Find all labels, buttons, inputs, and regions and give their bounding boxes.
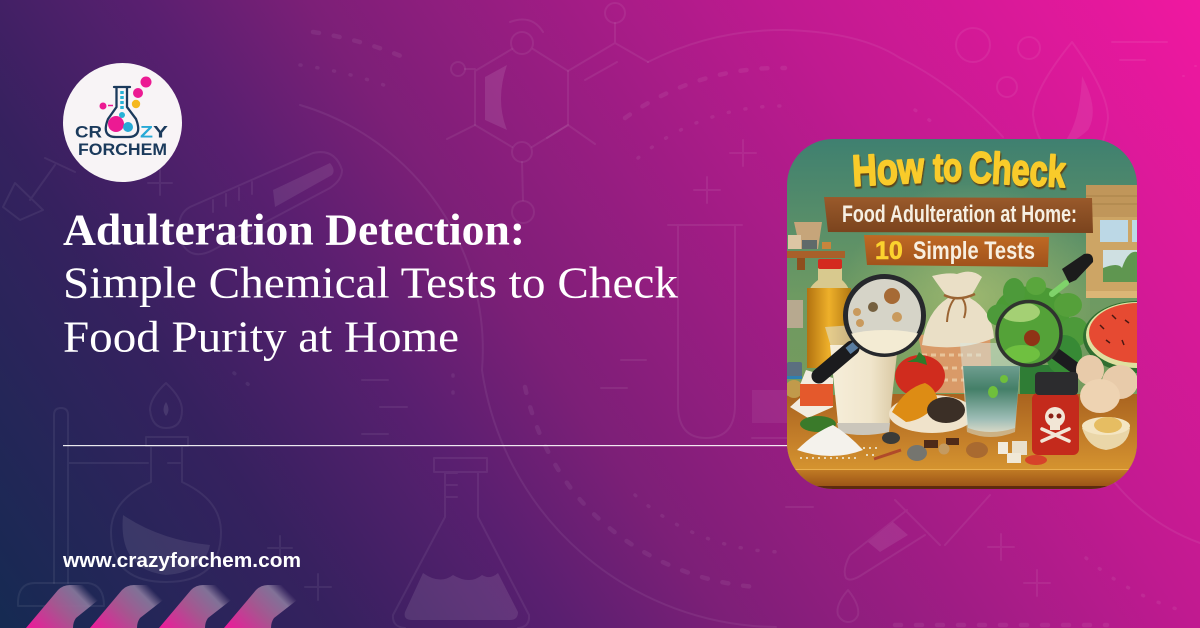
eggs — [1076, 355, 1138, 413]
plank: 10 simple tests — [864, 235, 1049, 267]
heading: how to check: How — [851, 143, 926, 196]
table — [787, 394, 1137, 489]
poison jar — [1032, 372, 1079, 455]
logo — [63, 63, 182, 182]
burner flame and round flask — [111, 383, 221, 582]
table scatter — [874, 432, 1047, 465]
heading: how to check: to — [933, 146, 962, 190]
erlenmeyer flask — [393, 458, 529, 628]
logo wordmark: FORCHEM — [78, 140, 167, 159]
sack and rice — [918, 272, 994, 393]
icon: flask — [100, 76, 152, 137]
magnifier 1 — [819, 276, 925, 376]
small bowl — [1082, 417, 1130, 450]
illustration: food adulteration card — [787, 139, 1137, 489]
plank: 10 simple tests: Simple Tests — [913, 237, 1035, 265]
shelf with jars — [787, 222, 845, 328]
website url: www.crazyforchem.com — [62, 550, 301, 572]
heading: how to check: Check — [967, 143, 1067, 197]
title: Food Purity at Home — [63, 312, 459, 362]
chevrons — [26, 585, 301, 628]
dashed arcs — [313, 32, 1107, 625]
watermelon — [1083, 301, 1137, 373]
heading: how to check — [853, 150, 1068, 190]
magnifier 2 — [997, 302, 1090, 379]
plus and minus marks — [268, 140, 1050, 600]
dropper bottom right — [837, 495, 990, 622]
water drop and circles — [956, 28, 1196, 150]
test tube — [668, 225, 742, 438]
greens — [987, 277, 1089, 403]
plank: 10 simple tests: 10 — [875, 237, 903, 265]
window — [1086, 185, 1141, 298]
large arcs — [300, 105, 776, 627]
thermometer and syringe — [3, 152, 342, 254]
title: Simple Chemical Tests to Check — [63, 258, 678, 308]
small spice jar and block — [785, 362, 833, 418]
burette stand — [18, 408, 148, 606]
plank: food adulteration: Food Adulteration at Home: — [842, 201, 1077, 228]
salt pile and leaf — [797, 416, 880, 458]
logo wordmark: CR — [75, 122, 102, 142]
logo wordmark: Y — [153, 122, 169, 142]
oil bottle — [807, 259, 851, 368]
logo wordmark: Z — [140, 122, 153, 142]
divider — [63, 445, 788, 446]
plank: food adulteration — [824, 197, 1093, 233]
logo wordmark — [75, 122, 169, 159]
milk glass — [825, 322, 898, 435]
dropper — [1052, 254, 1093, 294]
title: Adulteration Detection: — [63, 206, 525, 254]
wall — [787, 139, 1137, 489]
spice plate — [889, 383, 975, 433]
title — [63, 206, 678, 362]
water glass — [960, 343, 1022, 437]
molecule — [447, 3, 648, 223]
tomato — [895, 352, 945, 397]
